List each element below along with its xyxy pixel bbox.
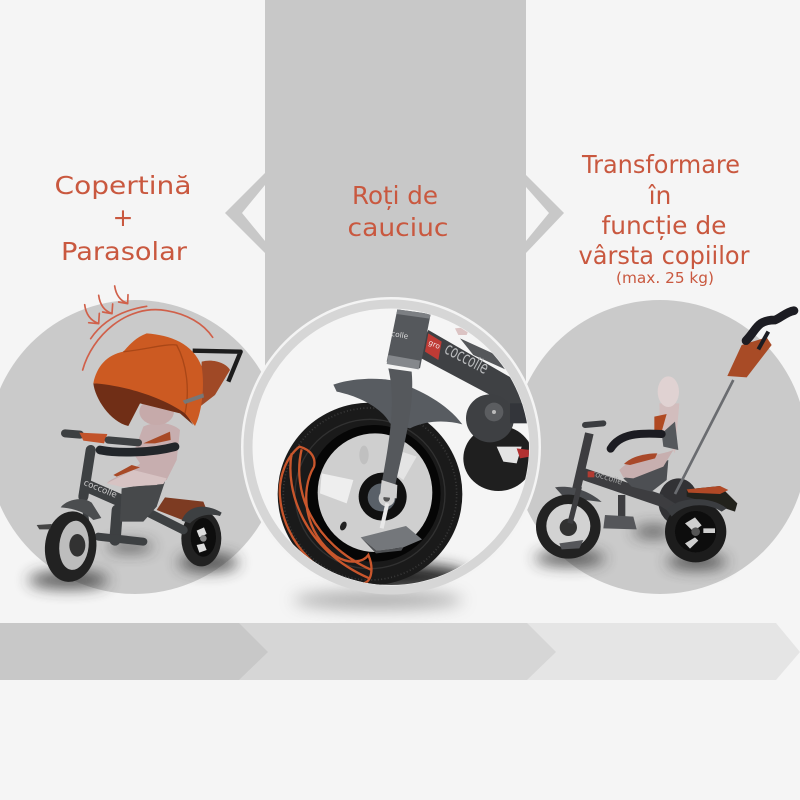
outer ring bbox=[241, 297, 541, 597]
front fork bbox=[570, 487, 579, 523]
heading: transformation by age: vârsta copiilor bbox=[578, 241, 750, 270]
basket bbox=[687, 486, 737, 512]
heading: transformation by age: în bbox=[648, 181, 671, 210]
centre ring with wheel close-up bbox=[241, 297, 541, 609]
seat harness bbox=[113, 432, 171, 477]
frame bbox=[83, 450, 183, 543]
armrest bbox=[611, 434, 662, 449]
sun arrows and arcs bbox=[83, 286, 213, 370]
centre grey band bbox=[265, 0, 526, 447]
red brand tag bbox=[425, 333, 442, 360]
front fender bbox=[555, 487, 602, 502]
front wheel bbox=[536, 495, 601, 559]
frame bbox=[572, 433, 687, 517]
folded rear canopy bbox=[200, 361, 230, 407]
seat hub bbox=[120, 482, 165, 522]
push handle bbox=[193, 351, 241, 382]
heading: rubber wheels: cauciuc bbox=[348, 213, 448, 242]
right chevron bbox=[526, 175, 564, 253]
front wheel bbox=[37, 509, 100, 584]
wheel close-up bbox=[278, 309, 529, 585]
red brand tag: gro bbox=[427, 338, 442, 351]
frame tag bbox=[588, 471, 594, 477]
heading: rubber wheels: Roți de bbox=[352, 181, 438, 210]
headrest bbox=[658, 376, 679, 407]
headrest bbox=[139, 398, 174, 425]
head tube bbox=[387, 309, 431, 368]
heading: canopy and sunshade: Parasolar bbox=[61, 237, 188, 266]
rear hinge bbox=[662, 422, 678, 450]
canopy top bbox=[93, 333, 203, 426]
fender bbox=[333, 379, 462, 428]
heading: canopy and sunshade: Copertină bbox=[54, 171, 192, 200]
axle clamp bbox=[380, 480, 397, 498]
seat base bbox=[623, 460, 668, 492]
folded canopy bbox=[727, 337, 772, 377]
ground shadows bbox=[28, 542, 238, 589]
seat fragment bbox=[460, 338, 507, 370]
arrow segment 1 bbox=[0, 623, 268, 680]
armrest bar bbox=[100, 447, 175, 452]
frame tube bbox=[422, 330, 523, 406]
canopy clamp bbox=[183, 393, 204, 404]
rear fender bbox=[182, 507, 222, 523]
hub bbox=[359, 473, 407, 521]
rear wheel bbox=[665, 501, 726, 562]
head tube label: colle bbox=[391, 329, 409, 341]
front fender bbox=[61, 499, 101, 520]
heading: canopy and sunshade bbox=[54, 171, 192, 266]
seat cushion bbox=[619, 450, 673, 478]
left tricycle with canopy bbox=[28, 286, 241, 589]
seat harness bbox=[654, 414, 667, 432]
bottom arrow bar bbox=[0, 623, 800, 680]
heading: transformation by age: Transformare bbox=[581, 150, 740, 179]
left chevron bbox=[225, 173, 265, 253]
seat back bbox=[659, 403, 679, 453]
arrow segment 3 bbox=[520, 623, 800, 680]
footrest bbox=[603, 515, 637, 529]
heading: canopy and sunshade: + bbox=[113, 203, 133, 232]
handlebar bbox=[65, 433, 138, 443]
rim bbox=[318, 433, 432, 552]
seat cushion bbox=[107, 423, 180, 487]
rear wheel bbox=[181, 510, 221, 566]
pedal bbox=[361, 526, 422, 551]
ground shadow bbox=[303, 563, 470, 591]
push bar bbox=[675, 380, 733, 494]
heading: transformation by age bbox=[578, 150, 750, 287]
rear fender bbox=[667, 499, 727, 517]
ground shadows bbox=[535, 526, 727, 569]
rear far wheel bbox=[658, 478, 698, 525]
right grey circle bbox=[513, 300, 800, 594]
shadow under ring bbox=[293, 591, 463, 609]
pedal arm bbox=[382, 503, 387, 528]
orange tyre tread highlight bbox=[280, 447, 372, 583]
frame logo: coccolle bbox=[82, 478, 118, 501]
frame logo: coccolle bbox=[441, 339, 492, 379]
brake hub bbox=[466, 394, 533, 442]
push handle bbox=[746, 311, 794, 341]
rear basket bbox=[157, 497, 207, 522]
arrow segment 2 bbox=[230, 623, 556, 680]
stem grip bbox=[585, 423, 603, 425]
heading: rubber wheels bbox=[348, 181, 448, 242]
tyre bbox=[278, 403, 462, 585]
heading: transformation by age: (max. 25 kg) bbox=[616, 269, 714, 287]
fork bbox=[382, 368, 412, 487]
right tricycle without canopy bbox=[535, 311, 794, 569]
left grey circle bbox=[0, 300, 282, 594]
frame logo: coccolle bbox=[590, 469, 624, 487]
rear wheel bbox=[463, 426, 533, 491]
canopy underside bbox=[93, 383, 193, 426]
heading: transformation by age: funcție de bbox=[602, 211, 726, 240]
